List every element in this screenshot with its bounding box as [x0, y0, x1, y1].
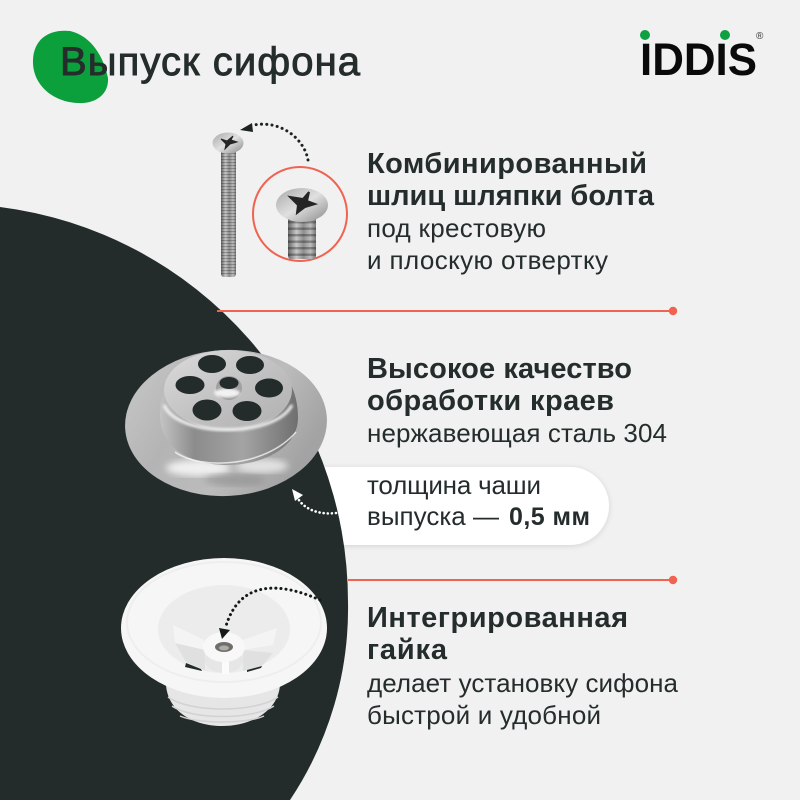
heading marker: green blob: [33, 31, 108, 103]
callout text: bowl thickness: выпуска —: [367, 501, 499, 531]
text block: integrated nut: гайка: [367, 634, 448, 666]
arrow: dotted arrow from zoom circle to screw head: [240, 123, 308, 160]
text block: integrated nut: Интегрированная: [367, 602, 628, 634]
drain slots: [185, 663, 202, 671]
center hub: [216, 376, 242, 400]
divider 2 with dot: [348, 576, 677, 584]
text block: combined slot: [367, 148, 655, 275]
text block: edge quality: [367, 353, 667, 448]
text block: integrated nut: быстрой и удобной: [367, 700, 601, 730]
icon: long screw: [212, 132, 244, 277]
text block: combined slot: под крестовую: [367, 213, 546, 243]
callout: bowl thickness pill background: [200, 467, 609, 545]
ribs: [173, 625, 205, 650]
hub: [205, 647, 243, 673]
logo: IDDIS: IDDIS: [640, 34, 757, 85]
arrow: black dotted arrow to nut: [219, 588, 320, 639]
logo: IDDIS: ®: [756, 31, 764, 42]
flange: [121, 558, 327, 698]
inner recess: [158, 585, 290, 673]
metal nut: [215, 642, 233, 652]
dark circular background panel: [0, 207, 348, 800]
text block: edge quality: нержавеющая сталь 304: [367, 418, 667, 448]
text block: integrated nut: [367, 602, 679, 730]
text block: edge quality: обработки краев: [367, 385, 614, 417]
callout text: bowl thickness: [367, 470, 590, 531]
text block: combined slot: и плоскую отвертку: [367, 245, 608, 275]
text block: edge quality: Высокое качество: [367, 353, 632, 385]
text block: combined slot: шлиц шляпки болта: [367, 180, 655, 212]
icon: zoomed screw head in coral circle: [253, 167, 347, 261]
divider 1 with dot: [217, 307, 677, 315]
bowl top: [164, 350, 292, 430]
bowl wall: [160, 350, 298, 465]
hole pattern: [176, 355, 283, 421]
text block: combined slot: Комбинированный: [367, 148, 647, 180]
thread: [166, 685, 280, 726]
icon: stainless steel drain cup: [121, 345, 331, 501]
text block: integrated nut: делает установку сифона: [367, 668, 679, 698]
icon: white plastic drain body with integrated nut: [121, 558, 327, 726]
callout text: bowl thickness: толщина чаши: [367, 470, 541, 500]
flange: [121, 345, 331, 501]
arrow: white dotted arrow to flange edge: [292, 489, 336, 513]
recess lower faces: [175, 643, 205, 670]
title: Выпуск сифона: [60, 40, 361, 84]
callout text: bowl thickness: 0,5 мм: [509, 503, 590, 531]
